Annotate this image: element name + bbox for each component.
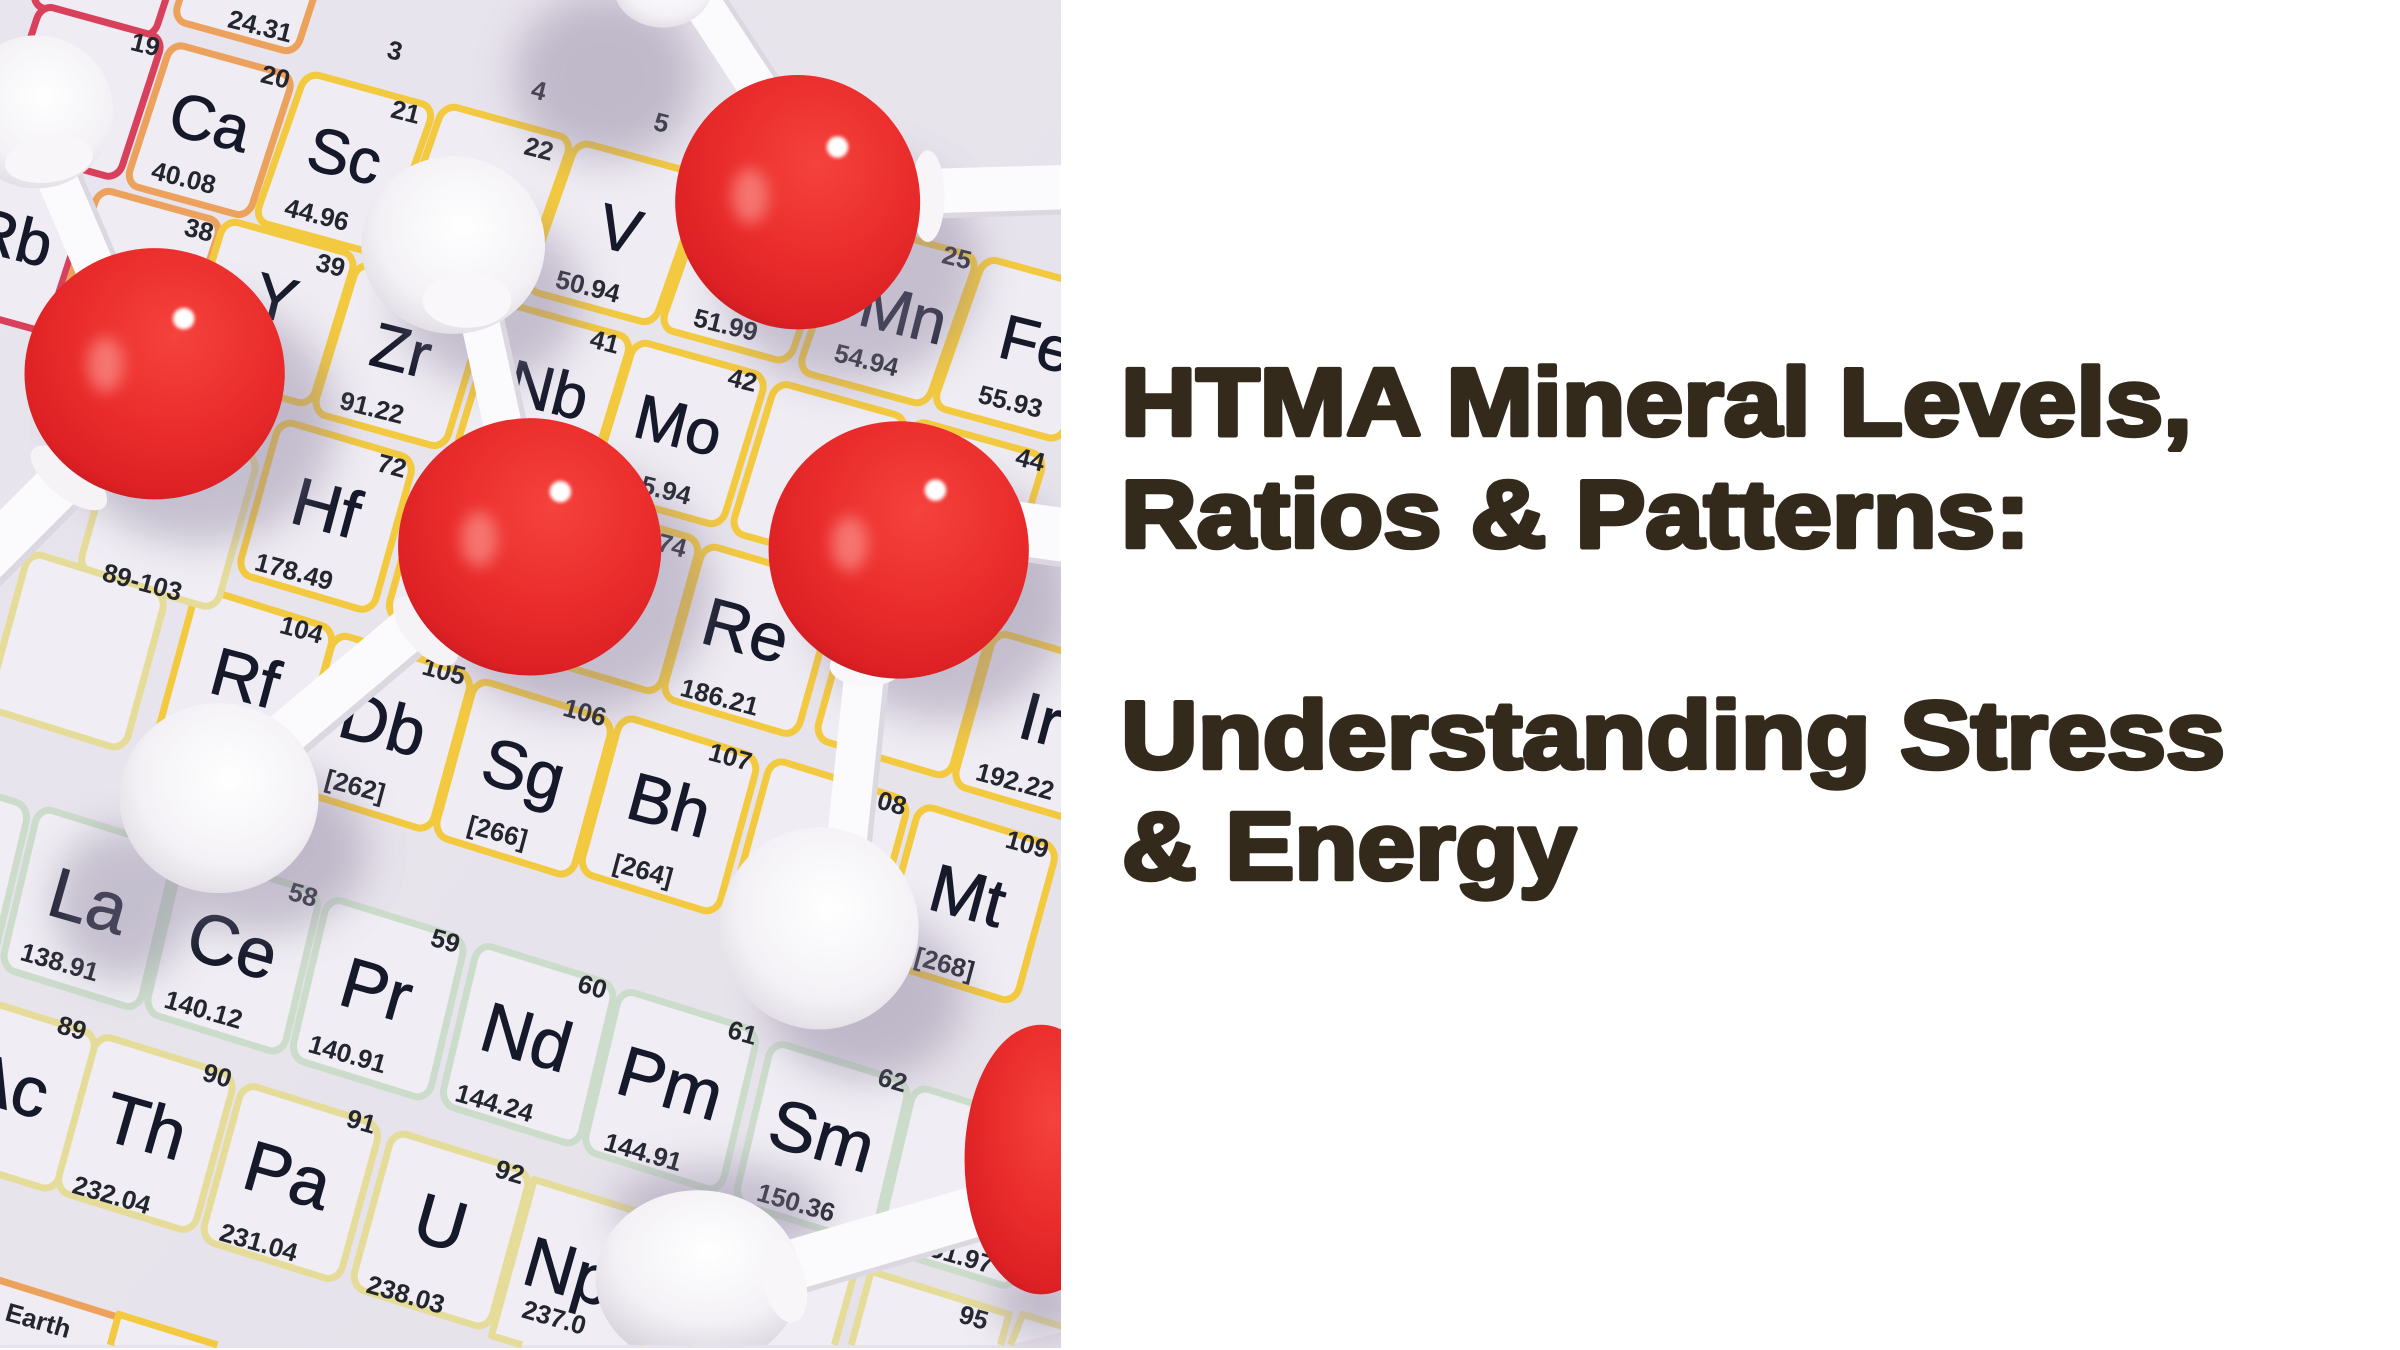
molecule sticks bbox=[0, 0, 1072, 1271]
atomic numbers and masses: 91 bbox=[343, 1103, 379, 1140]
element symbols: Np bbox=[515, 1221, 624, 1322]
element symbols: Zr bbox=[364, 310, 438, 392]
atomic numbers and masses: 150.36 bbox=[754, 1177, 839, 1228]
element symbols: Sm bbox=[761, 1083, 884, 1188]
atomic numbers and masses bbox=[2, 4, 1057, 1344]
element symbols: V bbox=[591, 191, 649, 269]
element symbols: Nb bbox=[501, 347, 595, 434]
atomic numbers and masses: 108 bbox=[860, 781, 910, 821]
atomic numbers and masses: 3 bbox=[384, 34, 406, 67]
atomic numbers and masses: 89-103 bbox=[99, 557, 185, 607]
element symbols: Db bbox=[331, 677, 434, 772]
atomic numbers and masses: 104 bbox=[277, 609, 327, 650]
atomic numbers and masses: 42 bbox=[725, 362, 760, 398]
atomic numbers and masses: 144.91 bbox=[601, 1127, 685, 1177]
heading: HTMA Mineral Levels, Ratios & Patterns: Ratios & Patterns: bbox=[1121, 461, 2030, 568]
atomic numbers and masses: 41 bbox=[587, 324, 622, 360]
atomic numbers and masses: 89 bbox=[54, 1009, 90, 1046]
atomic numbers and masses: 25 bbox=[939, 239, 975, 275]
element symbols: U bbox=[406, 1177, 476, 1267]
heading: Understanding Stress & Energy: Understanding Stress bbox=[1121, 682, 2225, 789]
element symbols: Mt bbox=[922, 850, 1014, 942]
atomic numbers and masses: 138.91 bbox=[17, 937, 102, 987]
atomic numbers and masses: Earth bbox=[2, 1297, 74, 1344]
atomic numbers and masses: 40.08 bbox=[149, 155, 219, 200]
element symbols: Nd bbox=[473, 987, 581, 1087]
atomic numbers and masses: [262] bbox=[322, 763, 388, 808]
atomic numbers and masses: 60 bbox=[574, 968, 611, 1005]
white atoms bbox=[0, 0, 919, 1345]
highlights on red atoms bbox=[87, 136, 946, 571]
element symbols: Pr bbox=[332, 942, 421, 1037]
atomic numbers and masses: 58 bbox=[285, 876, 321, 913]
atomic numbers and masses: 59 bbox=[427, 922, 464, 959]
atomic numbers and masses: 140.91 bbox=[305, 1028, 390, 1079]
heading: Understanding Stress & Energy bbox=[1121, 682, 2225, 900]
atomic numbers and masses: 140.12 bbox=[161, 984, 246, 1035]
element symbols: Pa bbox=[236, 1125, 341, 1225]
element symbols: La bbox=[40, 852, 138, 950]
atomic numbers and masses: 4 bbox=[528, 74, 550, 107]
atomic numbers and masses: 61 bbox=[725, 1014, 761, 1051]
photo: molecule model on periodic table bbox=[0, 0, 1061, 1348]
element symbols: Ca bbox=[162, 79, 257, 166]
atomic numbers and masses: 178.49 bbox=[252, 547, 336, 596]
atomic numbers and masses: 232.04 bbox=[69, 1169, 155, 1220]
element symbols: Hf bbox=[284, 464, 369, 554]
atomic numbers and masses: 92 bbox=[492, 1153, 528, 1190]
element symbols: Sg bbox=[474, 724, 573, 817]
atomic numbers and masses: 21 bbox=[388, 94, 423, 130]
atomic numbers and masses: 51.99 bbox=[690, 302, 761, 347]
atomic numbers and masses: 50.94 bbox=[553, 264, 624, 309]
atomic numbers and masses: 72 bbox=[374, 447, 410, 484]
atomic numbers and masses: 231.04 bbox=[216, 1217, 302, 1268]
element symbols: Re bbox=[694, 584, 797, 678]
element symbols: Rf bbox=[203, 634, 287, 724]
atomic numbers and masses: 55.93 bbox=[975, 379, 1046, 424]
element symbols: Sc bbox=[300, 113, 388, 199]
periodic table tiles bbox=[0, 0, 1130, 1345]
atomic numbers and masses: 20 bbox=[258, 59, 293, 95]
atomic numbers and masses: 105 bbox=[419, 651, 469, 691]
atomic numbers and masses: 91.22 bbox=[337, 385, 407, 430]
atomic numbers and masses: 106 bbox=[560, 692, 610, 732]
atomic numbers and masses: 186.21 bbox=[677, 672, 762, 722]
element symbols: Y bbox=[247, 260, 304, 338]
atomic numbers and masses: 144.24 bbox=[452, 1078, 537, 1128]
element symbols: Mo bbox=[627, 381, 729, 470]
atomic numbers and masses: 22 bbox=[521, 131, 557, 167]
atomic numbers and masses: 90 bbox=[199, 1057, 235, 1094]
soft shadows under molecule bbox=[54, 0, 1087, 1339]
atomic numbers and masses: 107 bbox=[705, 737, 755, 777]
atomic numbers and masses: 238.03 bbox=[363, 1269, 448, 1320]
atomic numbers and masses: 19 bbox=[128, 26, 163, 62]
red atoms bbox=[20, 75, 1118, 1294]
element symbols: Mn bbox=[853, 270, 954, 359]
heading: HTMA Mineral Levels, Ratios & Patterns: HTMA Mineral Levels, bbox=[1121, 349, 2192, 456]
atomic numbers and masses: 192.22 bbox=[973, 756, 1057, 806]
element symbols: Th bbox=[95, 1077, 196, 1175]
atomic numbers and masses: 24.31 bbox=[225, 4, 295, 48]
atomic numbers and masses: 44 bbox=[1013, 441, 1049, 478]
atomic numbers and masses: [268] bbox=[911, 941, 978, 986]
element symbols bbox=[0, 79, 1080, 1322]
atomic numbers and masses: 44.96 bbox=[282, 192, 352, 237]
atomic numbers and masses: 74 bbox=[654, 527, 690, 564]
atomic numbers and masses: 237.0 bbox=[519, 1294, 590, 1341]
photo background bbox=[0, 0, 1061, 1348]
atomic numbers and masses: 39 bbox=[313, 247, 348, 283]
atomic numbers and masses: 5 bbox=[651, 106, 672, 139]
atomic numbers and masses: 95 bbox=[956, 1299, 992, 1336]
element symbols: Pm bbox=[609, 1030, 732, 1136]
atomic numbers and masses: [264] bbox=[610, 848, 676, 892]
element symbols: Ce bbox=[179, 895, 287, 996]
atomic numbers and masses: 51.97 bbox=[926, 1233, 997, 1279]
atomic numbers and masses: 38 bbox=[181, 212, 217, 248]
atomic numbers and masses: [266] bbox=[464, 809, 531, 854]
element symbols: Bh bbox=[620, 759, 719, 853]
heading: Understanding Stress & Energy: & Energy bbox=[1122, 793, 1576, 900]
heading: HTMA Mineral Levels, Ratios & Patterns bbox=[1121, 349, 2192, 568]
atomic numbers and masses: 62 bbox=[875, 1062, 911, 1098]
atomic numbers and masses: 54.94 bbox=[831, 338, 902, 383]
atomic numbers and masses: 109 bbox=[1002, 824, 1052, 864]
atomic numbers and masses: 5.94 bbox=[638, 469, 695, 511]
